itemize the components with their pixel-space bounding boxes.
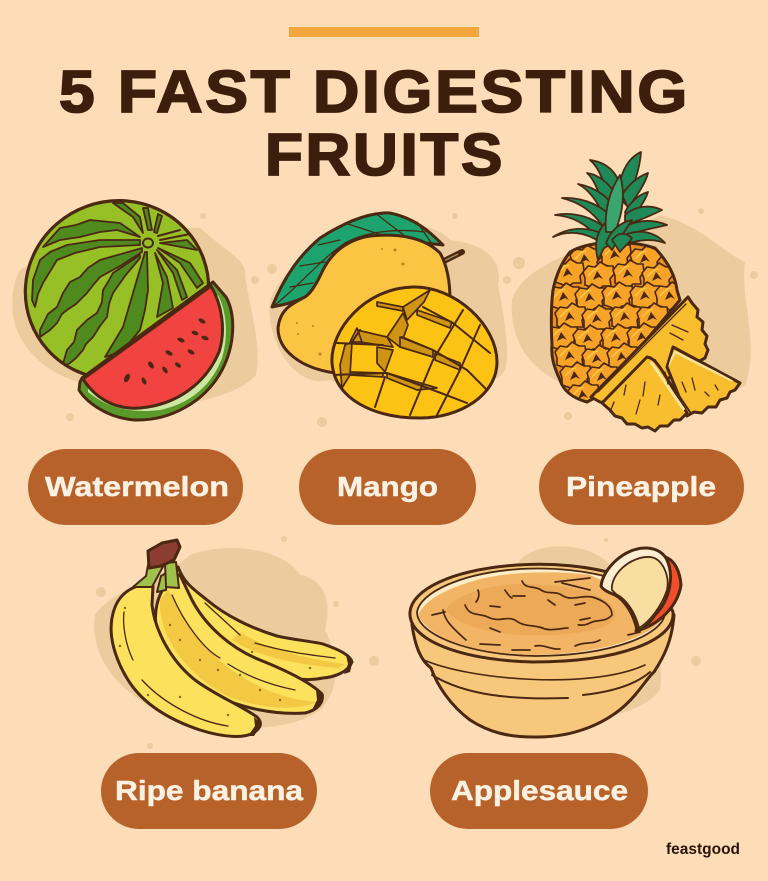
applesauce [418, 572, 660, 655]
background blob: pineapple [512, 208, 758, 420]
bowl bands [424, 660, 645, 680]
illustration: mango [272, 213, 497, 418]
seeds [123, 317, 209, 385]
banana crown [148, 540, 180, 568]
background blob: mango [267, 213, 511, 427]
middle banana [155, 575, 322, 713]
label: Watermelon [28, 449, 243, 525]
sauce squiggles [432, 578, 640, 650]
melon slice [79, 282, 233, 420]
label: Pineapple [539, 449, 744, 525]
illustration: applesauce bowl [410, 548, 681, 737]
illustration: watermelon [24, 199, 234, 422]
background blob: applesauce [450, 538, 701, 723]
label: Applesauce [430, 753, 648, 829]
front banana [111, 586, 260, 736]
bowl rim [410, 564, 673, 662]
illustration: pineapple [547, 152, 740, 431]
label: Ripe banana: Ripe banana [115, 775, 303, 806]
banana necks [133, 562, 179, 592]
banana speckles [119, 607, 311, 716]
stem [442, 252, 462, 262]
background blob: banana [94, 536, 379, 749]
label: Mango [299, 449, 476, 525]
title: 5 FAST DIGESTING [59, 59, 690, 125]
pineapple leaves [553, 152, 667, 260]
label: Ripe banana [101, 753, 317, 829]
mango speckles [296, 248, 404, 356]
banana tips [248, 655, 353, 736]
cut mango half [332, 287, 497, 418]
label: Pineapple: Pineapple [566, 471, 716, 502]
label: Applesauce: Applesauce [451, 775, 628, 806]
logo: feastgood: feastgood [666, 841, 740, 858]
mango body [278, 235, 450, 373]
bowl body [412, 615, 674, 737]
label: Mango: Mango [337, 471, 438, 502]
pineapple slices [591, 297, 740, 431]
background blob: watermelon [12, 213, 259, 421]
title [59, 59, 690, 188]
whole melon [24, 199, 210, 376]
top accent bar [289, 27, 479, 37]
pineapple body [547, 241, 686, 409]
title: FRUITS [265, 122, 505, 188]
label: Watermelon: Watermelon [45, 471, 229, 502]
leaf [272, 213, 443, 307]
apple wedge [601, 548, 681, 631]
illustration: ripe banana [111, 540, 353, 736]
back banana [174, 567, 352, 680]
